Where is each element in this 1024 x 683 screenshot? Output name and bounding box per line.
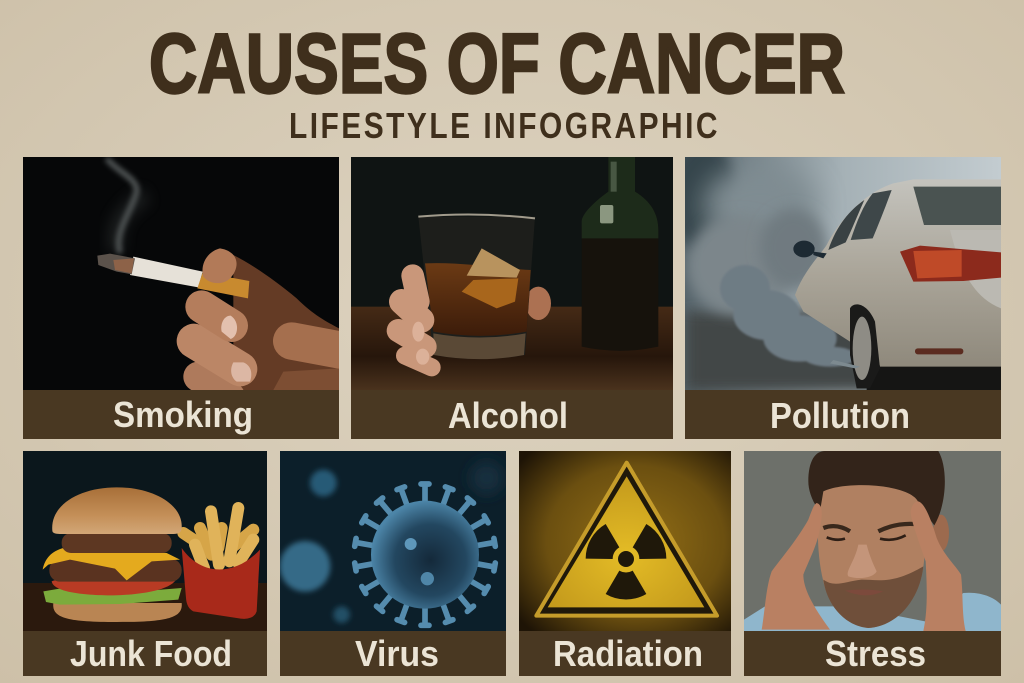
panel: smoking <box>23 157 339 439</box>
illustration: whisky glass and bottle <box>351 157 673 390</box>
label: Virus: Virus <box>355 633 439 674</box>
illustration: burger and fries <box>23 451 267 631</box>
panel: alcohol <box>351 157 673 439</box>
label: Stress: Stress <box>825 633 926 674</box>
heading block <box>149 16 846 146</box>
panel: pollution <box>685 157 1001 439</box>
illustration: man holding head <box>744 451 1001 631</box>
panel: virus <box>280 451 506 676</box>
panel: stress <box>744 451 1001 676</box>
illustration: cigarette in hand <box>23 157 339 390</box>
panel: junk food <box>23 451 267 676</box>
illustration: radiation warning sign <box>519 451 731 631</box>
illustration: virus particles <box>280 451 506 631</box>
label: Virus <box>280 631 506 676</box>
illustration: car with exhaust smoke <box>685 157 1001 390</box>
label: Junk Food <box>23 631 267 676</box>
subtitle: LIFESTYLE INFOGRAPHIC <box>289 105 720 146</box>
label: Pollution: Pollution <box>770 395 910 436</box>
label: Stress <box>744 631 1001 676</box>
label: Radiation: Radiation <box>553 633 703 674</box>
label: Junk Food: Junk Food <box>70 633 232 674</box>
panel: radiation <box>519 451 731 676</box>
title: CAUSES OF CANCER <box>149 16 845 110</box>
label: Pollution <box>685 390 1001 439</box>
label: Alcohol <box>351 390 673 439</box>
label: Smoking: Smoking <box>113 394 253 435</box>
label: Alcohol: Alcohol <box>448 395 568 436</box>
label: Smoking <box>23 390 339 439</box>
